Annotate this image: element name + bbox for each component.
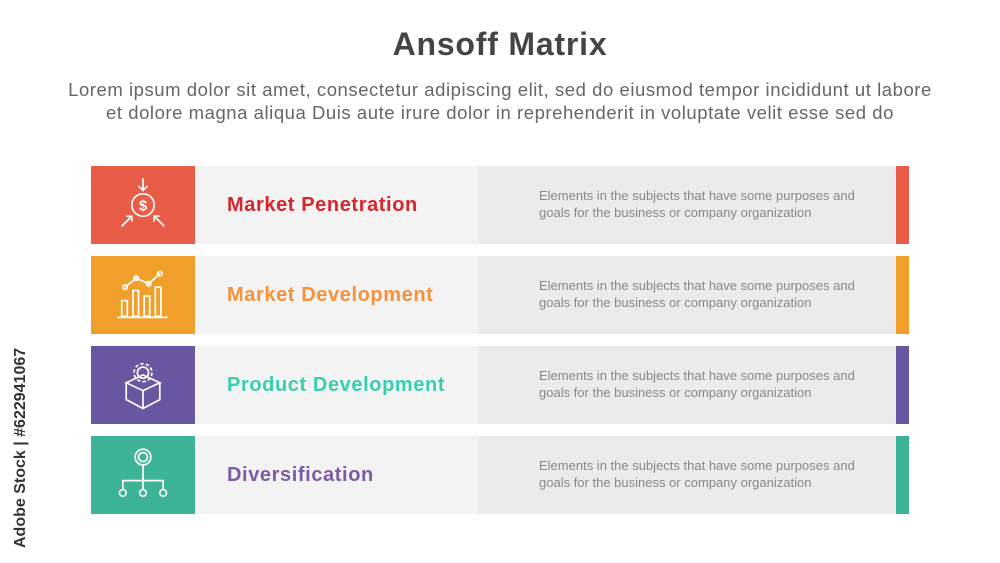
description: Elements in the subjects that have some purposes and (539, 188, 855, 203)
subtitle: et dolore magna aliqua Duis aute irure dolor in reprehenderit in voluptate velit esse sed do (106, 102, 894, 123)
icon: dollar arrows (91, 166, 195, 244)
description (539, 278, 855, 310)
description: Elements in the subjects that have some purposes and (539, 278, 855, 293)
heading: Diversification (227, 464, 374, 486)
icon: hierarchy (91, 436, 195, 514)
icon: gear box (91, 346, 195, 424)
description: goals for the business or company organization (539, 295, 811, 310)
row: market development (91, 256, 909, 334)
watermark text: Adobe Stock | #622941067 (12, 348, 29, 548)
subtitle (68, 79, 932, 123)
heading: Product Development (227, 374, 445, 396)
row: market penetration (91, 166, 909, 244)
description: Elements in the subjects that have some purposes and (539, 368, 855, 383)
description: Elements in the subjects that have some purposes and (539, 458, 855, 473)
row: diversification (91, 436, 909, 514)
description (539, 368, 855, 400)
icon: bar chart (91, 256, 195, 334)
icon: dollar arrows: $ (139, 199, 147, 215)
description (539, 458, 855, 490)
heading: Market Development (227, 284, 433, 306)
description: goals for the business or company organization (539, 475, 811, 490)
description: goals for the business or company organization (539, 385, 811, 400)
description: goals for the business or company organization (539, 205, 811, 220)
row: product development (91, 346, 909, 424)
subtitle: Lorem ipsum dolor sit amet, consectetur adipiscing elit, sed do eiusmod tempor incididunt ut labore (68, 79, 932, 100)
heading: Market Penetration (227, 194, 418, 216)
description (539, 188, 855, 220)
title: Ansoff Matrix (393, 26, 607, 62)
